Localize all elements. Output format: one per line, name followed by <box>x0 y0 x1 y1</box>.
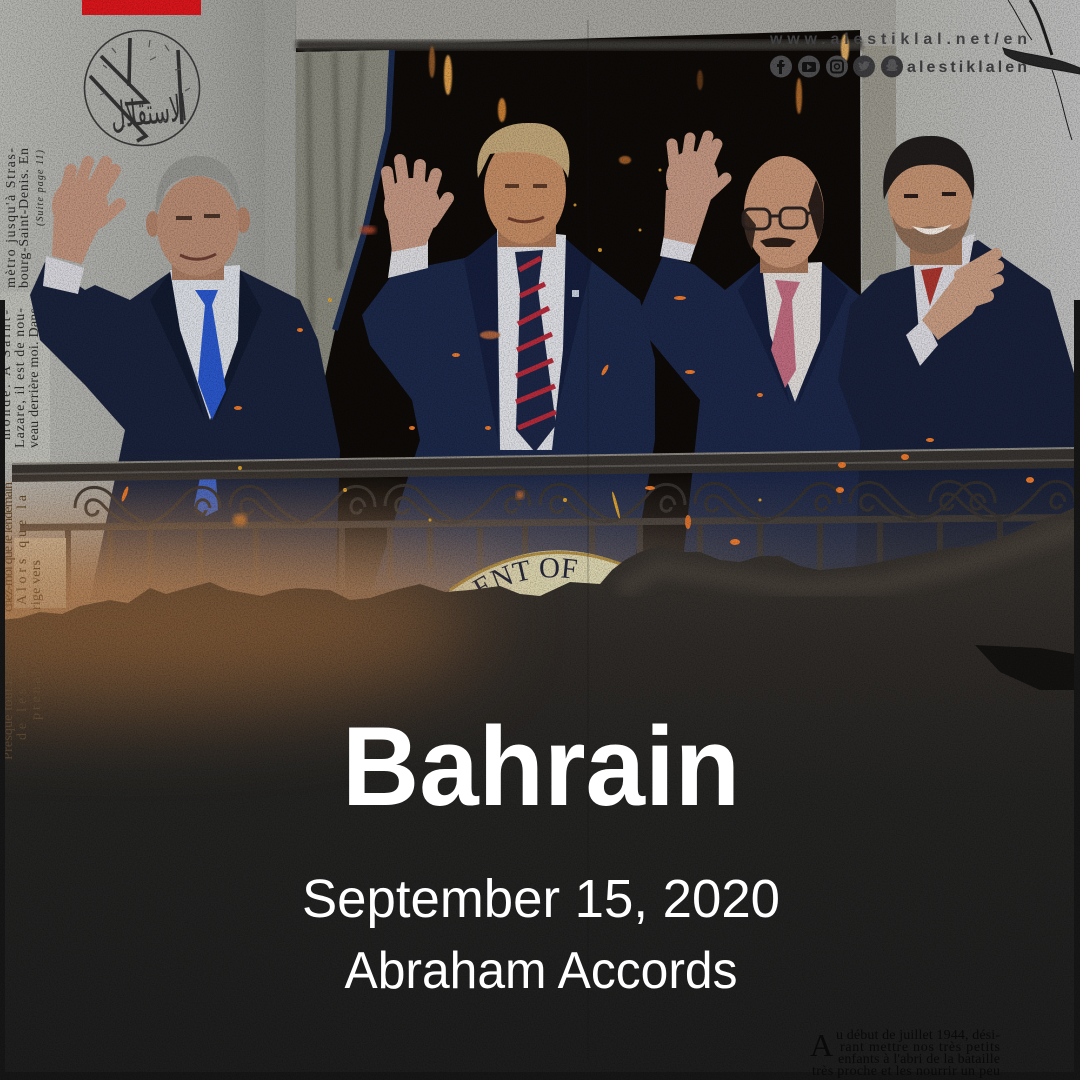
shirt cuff <box>388 240 428 278</box>
person: third man with pink tie <box>640 136 865 590</box>
head <box>498 225 556 247</box>
subtitle: Abraham Accords: Abraham Accords <box>344 942 738 1000</box>
faded newspaper text on dark panel <box>1 640 44 760</box>
shirt and tie <box>170 265 240 420</box>
waving hand <box>384 160 448 252</box>
waving hand <box>52 162 120 264</box>
suit <box>362 235 655 590</box>
worn paper edges <box>0 300 1080 1080</box>
warm orange glow <box>0 545 480 705</box>
window lights <box>429 34 849 164</box>
left lower paper scraps: Alors que la <box>15 494 30 605</box>
website address: www.alestiklal.net/en <box>769 31 1027 48</box>
hand on chest <box>922 254 998 340</box>
faded newspaper text on dark panel: Presque tout le mon- <box>1 640 16 760</box>
faded newspaper text on dark panel: de les mer- <box>15 640 30 740</box>
head <box>760 245 808 273</box>
wall cracks <box>0 0 1080 300</box>
balcony railing <box>12 447 1075 600</box>
newspaper paragraph bottom right: A <box>810 1027 833 1063</box>
left paper strip with French newspaper text: mètro jusqu'à Stras- <box>4 148 19 288</box>
left paper strip with French newspaper text <box>0 148 50 462</box>
shirt and tie <box>913 233 975 345</box>
waving hand <box>664 136 726 245</box>
newspaper paragraph bottom right: très proche et les nourrir un peu <box>812 1064 1000 1079</box>
shirt cuff <box>43 256 84 294</box>
title: Bahrain: Bahrain <box>342 704 740 829</box>
seal at the base of the balcony: ENT OF <box>472 558 578 589</box>
person: left man with blue tie <box>30 156 340 600</box>
person: right man with red tie <box>838 136 1076 590</box>
left lower paper scraps: chez-moi que le lendemain <box>1 482 16 612</box>
lapel pin <box>572 290 579 297</box>
shirt and tie <box>762 262 822 402</box>
left paper strip with French newspaper text: (Suite page 11) <box>35 149 46 226</box>
newspaper paragraph bottom right <box>810 1027 1000 1079</box>
faded newspaper text on dark panel: prenais le <box>29 640 44 720</box>
dark smudge at right edge <box>975 645 1080 690</box>
torn dark lower panel <box>0 505 1080 1080</box>
left lower paper scraps: rige vers <box>29 560 44 610</box>
left lower paper scraps <box>1 482 66 612</box>
striped tie <box>515 250 556 452</box>
date line: September 15, 2020 <box>302 869 780 929</box>
left paper strip with French newspaper text: bourg-Saint-Denis. En <box>17 148 32 288</box>
glasses <box>743 208 819 229</box>
embers and sparks <box>120 168 1034 545</box>
shirt cuff <box>660 235 696 262</box>
curtain <box>296 50 392 420</box>
seal calligraphy wording: الاستقلال <box>109 88 189 137</box>
red top bar <box>82 0 201 15</box>
shirt <box>497 228 566 450</box>
dark window opening <box>296 30 862 620</box>
newspaper paragraph bottom right: u début de juillet 1944, dési- <box>836 1028 1000 1043</box>
newspaper paragraph bottom right: rant mettre nos très petits <box>840 1040 1000 1055</box>
left paper strip with French newspaper text: Lazare, il est de nou- <box>13 308 28 448</box>
fading wash over lower balcony <box>0 470 1080 620</box>
shirt cuff <box>906 318 938 366</box>
vertical paper crease <box>587 20 589 1060</box>
social handle: alestiklalen <box>907 59 1027 76</box>
person: centre man with striped tie <box>362 123 655 590</box>
suit <box>640 255 865 590</box>
head <box>910 235 962 265</box>
head <box>172 250 224 280</box>
social media icons and handle <box>770 56 1027 78</box>
suit <box>838 240 1076 590</box>
seal at the base of the balcony <box>448 550 622 596</box>
logo: Al-Estiklal calligraphy seal <box>84 30 200 146</box>
suit <box>30 262 340 600</box>
newspaper paragraph bottom right: enfants à l'abri de la bataille <box>838 1052 1000 1067</box>
left paper strip with French newspaper text: veau derrière moi. Dans <box>27 308 42 448</box>
